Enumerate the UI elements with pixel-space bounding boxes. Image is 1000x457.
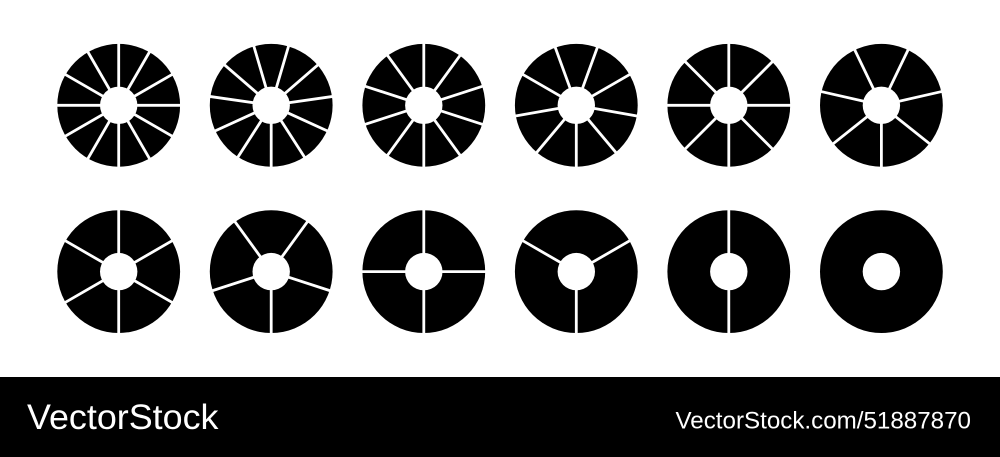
wheel: 11 segments	[208, 44, 335, 169]
wheel: 4 segments	[360, 208, 488, 336]
wheel: 10 segments	[362, 41, 485, 169]
wheel: 7 segments	[819, 44, 944, 169]
wheel: 1 segment	[820, 210, 943, 333]
wheel: 5 segments	[210, 210, 333, 336]
footer band	[0, 377, 1000, 457]
wheel: 8 segments	[665, 41, 793, 169]
image reference url: VectorStock.com/51887870	[676, 407, 971, 434]
wheel: 12 segments	[55, 41, 183, 169]
wheel: 6 segments	[57, 208, 180, 336]
brand logo text: VectorStock	[27, 397, 219, 437]
wheel: 2 segments	[667, 208, 790, 336]
wheel: 3 segments	[515, 210, 638, 336]
wheel: 9 segments	[513, 44, 639, 169]
